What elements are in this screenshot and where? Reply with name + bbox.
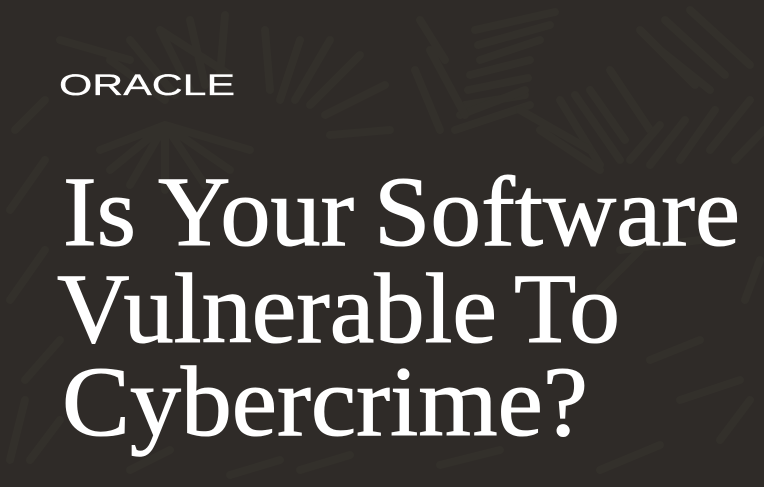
title: Is Your Software Vulnerable To Cybercrime?	[57, 168, 740, 457]
title: Is Your Software Vulnerable To Cybercrime?: Cybercrime?	[62, 346, 588, 457]
title: Is Your Software Vulnerable To Cybercrime?: Vulnerable	[57, 253, 497, 364]
title: Is Your Software Vulnerable To Cybercrime?: To	[514, 253, 620, 364]
